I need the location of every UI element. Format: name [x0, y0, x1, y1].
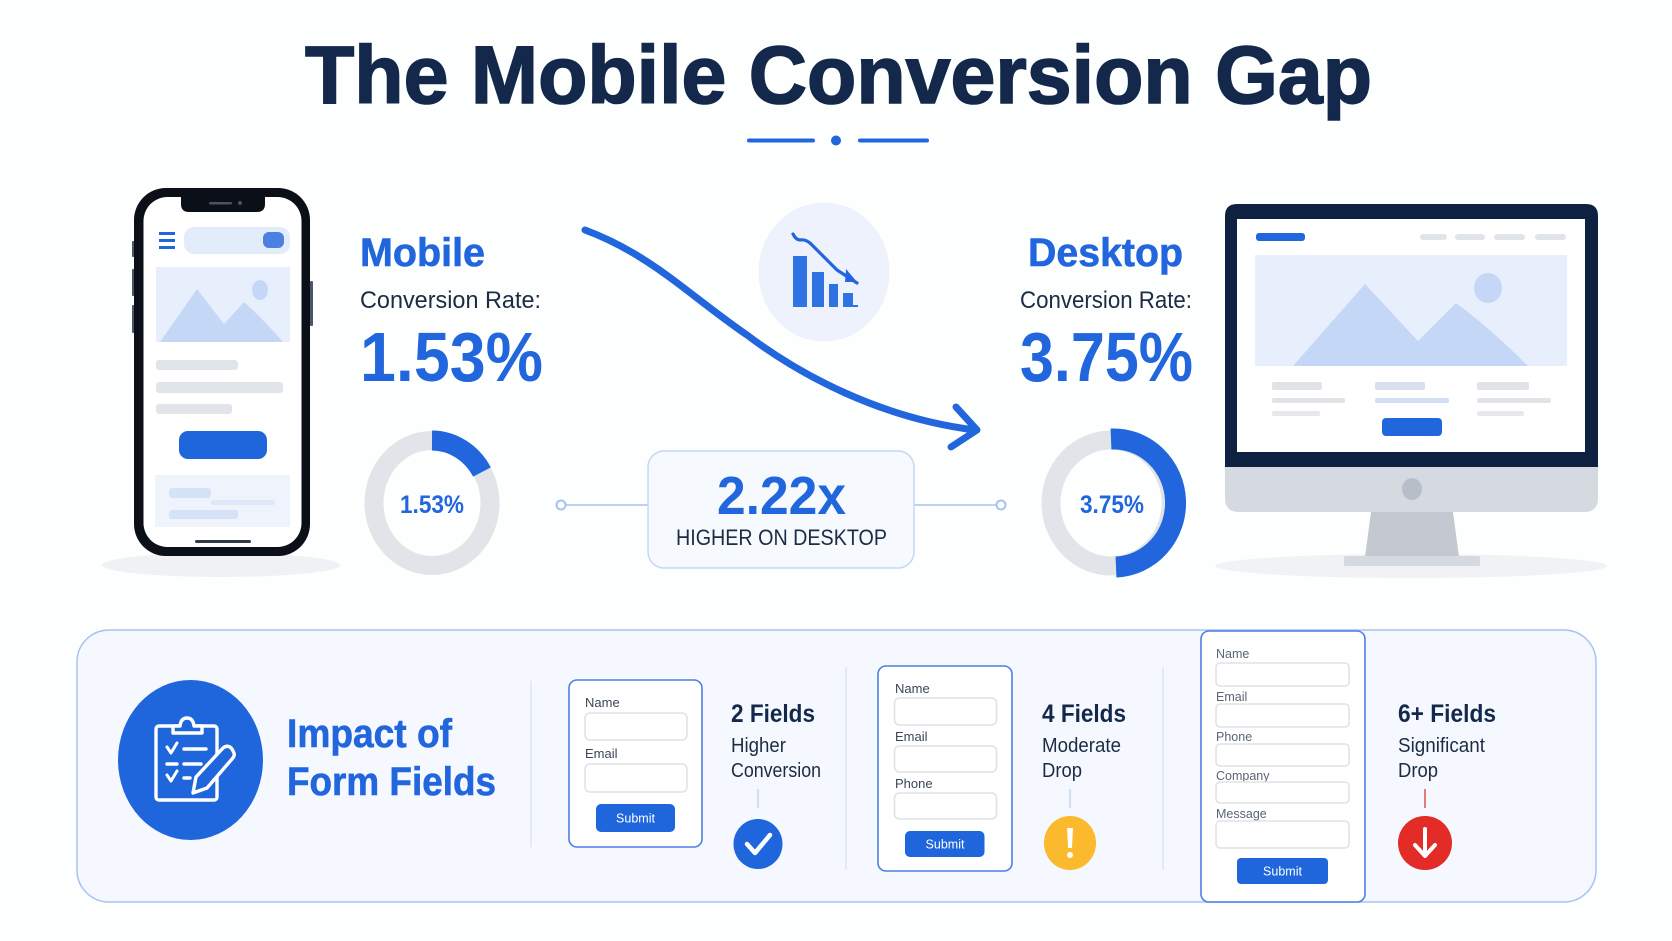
mobile stats	[360, 231, 543, 396]
phone shadow	[102, 553, 340, 577]
result text: 4 fields: Moderate	[1042, 734, 1121, 757]
monitor screen	[1237, 219, 1585, 452]
form mock: 4 fields: Phone	[895, 776, 933, 791]
form mock: 4 fields: Submit	[926, 838, 965, 852]
callout: 2.22x higher on desktop: 2.22x	[717, 466, 846, 526]
mobile donut chart: 1.53%	[400, 491, 464, 519]
status: warning	[1044, 789, 1096, 870]
form mock: 6+ fields: Message	[1216, 807, 1267, 821]
phone body	[134, 188, 310, 556]
form mock: 6+ fields	[1201, 631, 1365, 902]
callout: 2.22x higher on desktop: HIGHER ON DESKTOP	[676, 525, 887, 550]
result text: 6+ fields: Significant	[1398, 734, 1485, 757]
title ornament	[747, 136, 929, 146]
phone speaker	[209, 201, 242, 205]
mobile label: Mobile	[360, 231, 485, 275]
result text: 2 fields: Higher	[731, 734, 786, 757]
icon: declining bar chart	[758, 202, 890, 342]
menu icon	[159, 232, 175, 249]
section heading	[287, 712, 496, 804]
section heading: Impact of	[287, 712, 453, 756]
desktop donut chart	[1051, 439, 1176, 567]
dividers	[531, 667, 1163, 870]
mobile sublabel: Conversion Rate:	[360, 287, 541, 314]
form mock: 6+ fields: Name	[1216, 647, 1249, 661]
form mock: 6+ fields: Company	[1216, 769, 1270, 783]
site content columns	[1272, 382, 1551, 416]
monitor shadow	[1215, 554, 1607, 578]
phone screen	[144, 197, 302, 547]
monitor bezel	[1225, 204, 1598, 467]
connector: left	[556, 500, 648, 510]
result text: 4 fields: 4 Fields	[1042, 700, 1126, 728]
form mock: 4 fields: Email	[895, 729, 928, 744]
result text: 2 fields	[731, 700, 821, 782]
form mock: 6+ fields: Email	[1216, 690, 1247, 704]
site logo bar	[1256, 233, 1305, 241]
search button	[263, 232, 284, 248]
phone text lines	[156, 360, 283, 414]
site CTA button	[1382, 418, 1442, 436]
logo button	[1402, 478, 1422, 500]
desktop stats	[1020, 231, 1193, 396]
site nav	[1420, 234, 1566, 240]
form mock: 4 fields	[878, 666, 1012, 871]
home indicator	[195, 540, 251, 543]
form mock: 2 fields	[569, 680, 702, 847]
mobile rate: 1.53%	[360, 318, 543, 396]
form mock: 6+ fields: Submit	[1263, 864, 1302, 878]
phone hero image	[156, 267, 290, 342]
title: The Mobile Conversion Gap	[305, 30, 1372, 121]
search pill	[184, 227, 290, 254]
form mock: 4 fields: Name	[895, 681, 930, 696]
form mock: 6+ fields: Phone	[1216, 730, 1252, 744]
phone notch	[181, 196, 265, 212]
result text: 6+ fields: Drop	[1398, 759, 1438, 782]
form mock: 2 fields: Name	[585, 695, 620, 710]
monitor base	[1344, 556, 1480, 566]
panel: impact of form fields	[77, 630, 1596, 902]
result text: 6+ fields: 6+ Fields	[1398, 700, 1496, 728]
result text: 2 fields: Conversion	[731, 759, 821, 782]
icon: clipboard and pencil	[118, 680, 263, 840]
connector: right	[914, 500, 1006, 510]
desktop donut chart: 3.75%	[1080, 491, 1144, 519]
mobile donut chart	[374, 440, 490, 566]
desktop label: Desktop	[1028, 231, 1183, 275]
phone side buttons	[132, 241, 313, 333]
result text: 4 fields: Drop	[1042, 759, 1082, 782]
form mock: 2 fields: Submit	[616, 812, 655, 826]
status: red down arrow	[1398, 789, 1452, 870]
desktop monitor illustration	[1215, 204, 1607, 578]
section heading: Form Fields	[287, 760, 496, 804]
result text: 4 fields	[1042, 700, 1126, 782]
form mock: 2 fields: Email	[585, 746, 618, 761]
desktop rate: 3.75%	[1020, 318, 1193, 396]
result text: 2 fields: 2 Fields	[731, 700, 815, 728]
monitor stand	[1365, 512, 1459, 557]
monitor chin	[1225, 460, 1598, 512]
site hero image	[1255, 255, 1567, 366]
result text: 6+ fields	[1398, 700, 1496, 782]
desktop sublabel: Conversion Rate:	[1020, 287, 1192, 314]
phone lower band	[155, 475, 290, 527]
phone illustration	[102, 188, 340, 577]
callout: 2.22x higher on desktop	[648, 451, 914, 568]
status: check	[734, 789, 782, 869]
downward arrow	[585, 230, 977, 447]
phone CTA button	[179, 431, 267, 459]
